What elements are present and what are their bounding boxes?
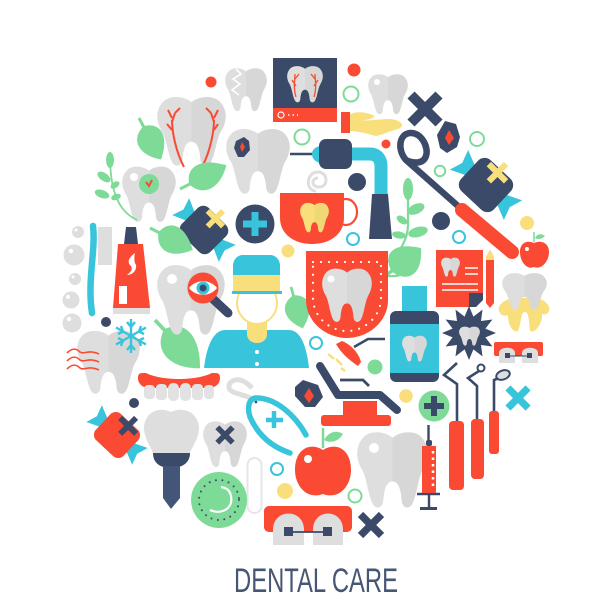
leaf — [127, 112, 173, 166]
yellow dot — [277, 483, 293, 499]
green dot — [368, 360, 382, 374]
icon: big braces — [264, 506, 352, 545]
icon: tooth with red roots — [157, 97, 226, 167]
leaf — [279, 284, 315, 332]
blue ring — [453, 231, 465, 243]
icon: big apple — [295, 428, 351, 495]
icon: left sprig — [94, 152, 137, 220]
icon: toothbrush — [90, 226, 112, 313]
icon: steam swirl — [308, 172, 326, 191]
green ring — [344, 86, 358, 102]
icon: dental floss — [191, 458, 262, 528]
icon: mouth mirror — [489, 368, 511, 454]
icon: small braces — [494, 342, 543, 363]
icon: red candy with dark cross — [82, 395, 157, 470]
leaf — [144, 216, 199, 262]
dark dot — [101, 317, 111, 327]
icon: candy with yellow cross — [167, 188, 246, 267]
leaf — [174, 153, 232, 201]
icon: dentist — [204, 255, 309, 368]
icon: x-ray panel — [273, 58, 337, 122]
icon: syringe — [417, 425, 440, 510]
dark circle — [348, 173, 366, 191]
icon: dental drill — [290, 139, 392, 239]
pearls — [62, 226, 84, 332]
blue ring — [347, 233, 359, 245]
icon: big tooth — [357, 432, 428, 508]
icon: tooth sensitive to cold — [67, 331, 140, 394]
yellow dot — [399, 389, 413, 403]
icon: small apple — [520, 232, 549, 268]
icon: tooth with yellow roots — [499, 273, 549, 332]
yellow dot — [520, 216, 534, 230]
icon: dental implant — [144, 410, 199, 509]
green ring — [435, 166, 445, 176]
red dot — [348, 64, 360, 76]
icon: chipped tooth — [225, 68, 267, 111]
icon: document with pencil — [436, 250, 494, 308]
icon: mouthwash bottle — [390, 286, 439, 382]
red dot — [382, 140, 390, 148]
icon: dental chair — [320, 339, 397, 426]
leaf — [143, 308, 212, 380]
blue ring — [271, 463, 283, 475]
icon: red cup with tooth — [280, 193, 357, 244]
icon: healthy tooth with check — [122, 167, 176, 222]
red dot — [206, 76, 216, 88]
icon: center sprig — [388, 178, 429, 276]
green ring — [470, 132, 484, 146]
dark circle — [432, 212, 450, 230]
green ring — [294, 130, 310, 144]
icon: dentures — [138, 373, 220, 401]
icon: tooth with dark cross — [203, 421, 247, 467]
icon: blue cross — [508, 388, 528, 408]
leaf — [374, 236, 431, 289]
icon: plain tooth top right — [368, 74, 408, 114]
title: DENTAL CARE — [234, 562, 398, 600]
icon: plus in dark circle — [236, 204, 274, 244]
blue ring — [310, 337, 322, 349]
dark dot — [129, 398, 139, 408]
icon: decay gem — [437, 121, 460, 153]
icon: dark cross — [360, 514, 382, 536]
icon: decay gem — [295, 380, 323, 407]
icon: probe two — [468, 364, 484, 479]
icon: red shield with tooth — [306, 251, 388, 338]
icon: candy with yellow cross — [444, 139, 533, 226]
icon: tooth with decay — [226, 129, 290, 194]
yellow dot — [282, 244, 294, 258]
icon: caring hand — [341, 112, 402, 136]
icon: spiky pain tooth — [442, 306, 496, 360]
green ring — [348, 490, 362, 502]
icon: dental pliers — [229, 380, 306, 453]
icon: probe one — [444, 363, 464, 490]
icon: plus in green circle — [418, 390, 450, 422]
icon: dental mirror with red handle — [400, 133, 512, 252]
icon: snowflake — [116, 319, 146, 353]
icon: toothpaste tube — [113, 227, 150, 314]
icon: tooth with magnifier — [157, 265, 228, 335]
icon: dark cross — [411, 95, 439, 123]
